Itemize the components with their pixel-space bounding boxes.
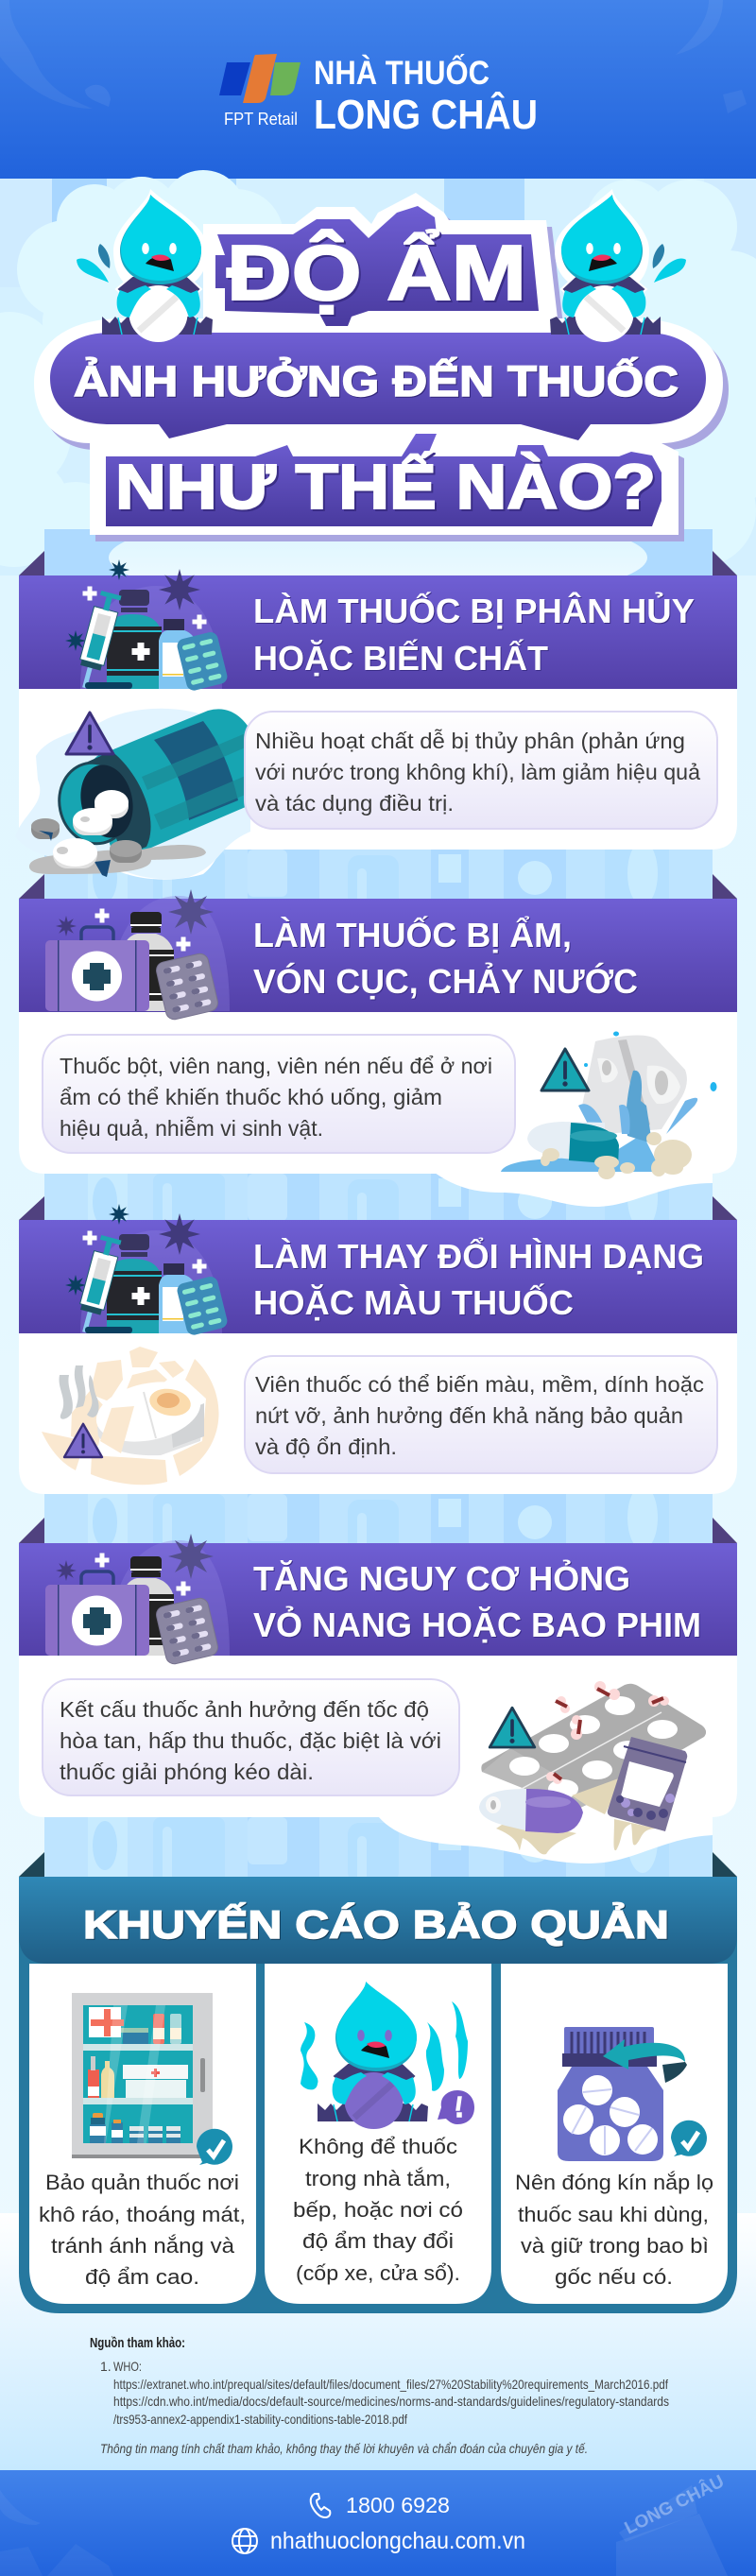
card: close the lid <box>501 1964 728 2304</box>
ribbon fold <box>19 874 737 899</box>
heading: VÓN CỤC, CHẢY NƯỚC <box>253 961 638 1001</box>
panel: storage recommendations <box>19 1852 737 2313</box>
brand name: NHÀ THUỐC <box>314 54 490 92</box>
store watermark: LONG CHÂU <box>621 2471 728 2538</box>
card body <box>19 689 737 850</box>
text: (cốp xe, cửa sổ). <box>296 2261 460 2285</box>
title shadow <box>40 199 729 541</box>
card body <box>19 1333 737 1494</box>
references: Thông tin mang tính chất tham khảo, không thay thế lời khuyên và chẩn đoán của chuyên gia y tế. <box>100 2441 588 2456</box>
illustration: spilled bottle <box>15 709 265 880</box>
icon: first aid kit <box>45 889 230 1022</box>
heading <box>253 915 638 1001</box>
heading: LÀM THAY ĐỔI HÌNH DẠNG <box>253 1235 704 1276</box>
text: khô ráo, thoáng mát, <box>39 2203 246 2226</box>
panel: section 3 <box>19 1196 737 1494</box>
text box: thuốc giải phóng kéo dài. <box>60 1760 314 1784</box>
text: thuốc sau khi dùng, <box>518 2203 709 2226</box>
icon: medicine bottles <box>65 1204 229 1336</box>
heading: TĂNG NGUY CƠ HỎNG <box>253 1558 630 1598</box>
header band <box>0 0 756 179</box>
ĐỘ ẨM title block <box>215 206 539 326</box>
references: Nguồn tham khảo: <box>90 2336 185 2351</box>
text box: với nước trong không khí), làm giảm hiệu quả <box>255 760 700 784</box>
text box <box>43 1679 459 1795</box>
icon: first aid kit <box>45 1534 230 1666</box>
text box: Nhiều hoạt chất dễ bị thủy phân (phản ứng <box>255 729 685 753</box>
text <box>39 2171 246 2289</box>
text: trong nhà tắm, <box>305 2167 451 2190</box>
title white backing <box>34 193 723 535</box>
text box: và độ ổn định. <box>255 1434 397 1459</box>
heading <box>253 591 695 678</box>
text box: hiệu quả, nhiễm vi sinh vật. <box>60 1116 323 1141</box>
header band <box>19 575 737 689</box>
panel: section 1 <box>15 551 737 880</box>
text box: Viên thuốc có thể biến màu, mềm, dính hoặc <box>255 1372 704 1397</box>
header band <box>19 1543 737 1656</box>
references: 1. <box>100 2359 112 2374</box>
ribbon fold <box>19 1196 737 1220</box>
illustration: cracked tablet <box>42 1347 219 1485</box>
subtitle speech bubble: ẢNH HƯỞNG ĐẾN THUỐC <box>74 357 679 405</box>
illustration: medicine cabinet <box>72 1993 232 2165</box>
website: nhathuoclongchau.com.vn <box>270 2528 525 2554</box>
footer <box>0 2470 756 2576</box>
NHƯ THẾ NÀO block <box>106 434 662 526</box>
heading <box>253 1558 701 1644</box>
text <box>293 2135 463 2285</box>
icon: medicine bottles <box>65 559 229 692</box>
text <box>515 2171 713 2289</box>
mascot right <box>550 189 686 342</box>
brand name: LONG CHÂU <box>314 91 538 138</box>
text box: Kết cấu thuốc ảnh hưởng đến tốc độ <box>60 1697 429 1722</box>
text box <box>43 1035 515 1153</box>
heading: HOẶC MÀU THUỐC <box>253 1282 574 1322</box>
ribbon fold <box>19 1852 737 1877</box>
ribbon fold <box>19 1518 737 1543</box>
header band <box>19 1220 737 1333</box>
text box: hòa tan, hấp thu thuốc, đặc biệt là với <box>60 1728 441 1753</box>
text: tránh ánh nắng và <box>51 2234 235 2258</box>
patterned medicine shelf column <box>44 179 713 1883</box>
lower white to blue background <box>0 2213 756 2470</box>
recommendation header <box>19 1877 737 1964</box>
text: Không để thuốc <box>299 2135 457 2158</box>
text: độ ẩm thay đổi <box>302 2229 454 2253</box>
text: Bảo quản thuốc nơi <box>45 2171 239 2194</box>
panel body <box>19 1928 737 2313</box>
heading <box>253 1235 704 1322</box>
phone number: 1800 6928 <box>346 2493 450 2517</box>
references: /trs953-annex2-appendix1-stability-conditions-table-2018.pdf <box>113 2412 407 2427</box>
panel: section 2 <box>19 874 737 1207</box>
text: và giữ trong bao bì <box>521 2234 709 2258</box>
illustration: wet pill splash <box>435 1032 716 1207</box>
brand name <box>314 54 538 138</box>
FPT Retail logo: FPT Retail <box>224 110 298 129</box>
text box: Thuốc bột, viên nang, viên nén nếu để ở nơi <box>60 1054 492 1078</box>
mascot left <box>77 189 213 342</box>
text: bếp, hoặc nơi có <box>293 2198 463 2222</box>
icon: globe <box>232 2529 257 2553</box>
references: https://cdn.who.int/media/docs/default-source/medicines/norms-and-standards/guidelines/regulatory-standards <box>113 2394 669 2409</box>
card: avoid humid places <box>265 1964 491 2304</box>
text box: ẩm có thể khiến thuốc khó uống, giảm <box>60 1085 442 1109</box>
card body <box>19 1012 737 1174</box>
text: Nên đóng kín nắp lọ <box>515 2171 713 2194</box>
store watermark <box>616 2471 728 2576</box>
text box <box>245 1356 717 1473</box>
card: store in dry place <box>29 1964 256 2304</box>
text: độ ẩm cao. <box>85 2265 199 2289</box>
ribbon fold <box>19 551 737 575</box>
heading: LÀM THUỐC BỊ ẨM, <box>253 915 572 954</box>
text box: và tác dụng điều trị. <box>255 791 454 816</box>
references <box>90 2336 669 2456</box>
panel: section 4 <box>19 1518 737 1863</box>
subtitle speech bubble <box>50 333 706 440</box>
card body <box>19 1656 737 1817</box>
NHƯ THẾ NÀO block: NHƯ THẾ NÀO? <box>115 452 656 523</box>
recommendation header: KHUYẾN CÁO BẢO QUẢN <box>83 1901 669 1947</box>
text: gốc nếu có. <box>555 2265 673 2289</box>
illustration: mascot with waves <box>301 1982 474 2129</box>
title lockup <box>34 189 729 541</box>
title lockup: ĐỘ ẨM <box>227 229 526 317</box>
text box <box>245 712 717 829</box>
heading: HOẶC BIẾN CHẤT <box>253 639 548 678</box>
references: WHO: <box>113 2359 142 2374</box>
text box: nứt vỡ, ảnh hưởng đến khả năng bảo quản <box>255 1403 683 1428</box>
icon: phone <box>311 2494 330 2517</box>
title background clouds <box>0 170 756 605</box>
header band <box>19 899 737 1012</box>
illustration: pill bottle with arrow <box>558 2027 707 2161</box>
illustration: damaged blister and capsule <box>378 1681 713 1863</box>
FPT Retail logo <box>219 54 301 129</box>
heading: LÀM THUỐC BỊ PHÂN HỦY <box>253 591 695 630</box>
heading: VỎ NANG HOẶC BAO PHIM <box>253 1605 701 1644</box>
